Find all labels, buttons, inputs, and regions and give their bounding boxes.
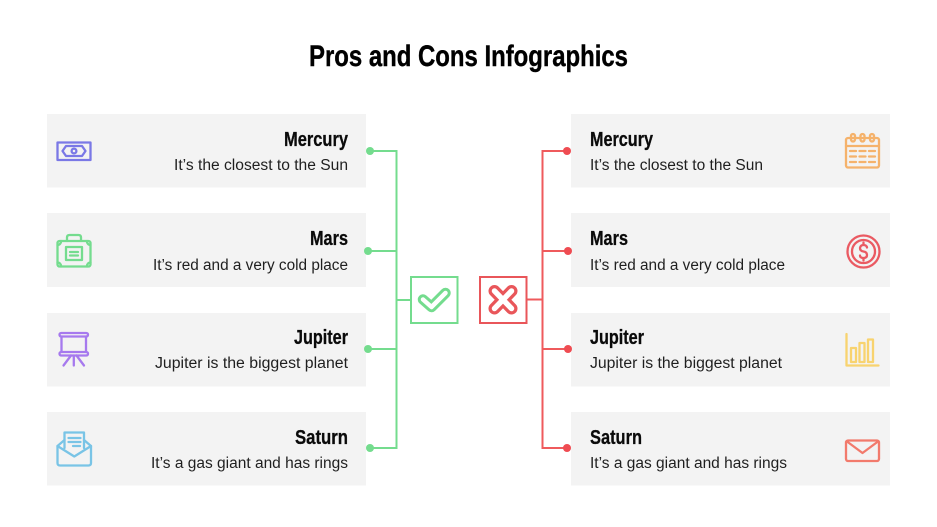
heading: Mars: Mars xyxy=(310,227,348,250)
icon: envelope xyxy=(846,440,879,461)
heading: Saturn: Saturn xyxy=(295,426,348,449)
heading: Mars: Mars xyxy=(590,227,628,250)
panel: cons Saturn xyxy=(571,412,890,486)
heading: Saturn: Saturn xyxy=(590,426,642,449)
icon: calendar xyxy=(846,134,879,168)
text: Jupiter description: Jupiter is the biggest planet xyxy=(155,355,349,372)
text: Jupiter description: Jupiter is the biggest planet xyxy=(590,355,783,372)
connector: pros xyxy=(364,147,411,452)
text: Mercury description: It’s the closest to the Sun xyxy=(590,157,763,174)
panel: pros Mercury xyxy=(47,114,366,188)
panel: pros Jupiter xyxy=(47,313,366,386)
text: Mercury description: It’s the closest to the Sun xyxy=(174,157,348,174)
text: Mars description: It’s red and a very cold place xyxy=(590,257,785,274)
heading: Jupiter: Jupiter xyxy=(294,326,348,349)
icon: open envelope xyxy=(58,432,91,466)
text: Saturn description: It’s a gas giant and has rings xyxy=(590,455,787,472)
panel: pros Mars xyxy=(47,213,366,287)
text: Mars description: It’s red and a very cold place xyxy=(153,257,348,274)
heading: Mercury: Mercury xyxy=(284,128,348,151)
panel: cons Jupiter xyxy=(571,313,890,386)
heading: Jupiter: Jupiter xyxy=(590,326,644,349)
panel: cons Mars xyxy=(571,213,890,287)
heading: Mercury: Mercury xyxy=(590,128,653,151)
title: Pros and Cons Infographics xyxy=(309,40,628,73)
icon: check box xyxy=(411,277,458,323)
icon: cross box xyxy=(480,277,526,323)
text: Saturn description: It’s a gas giant and has rings xyxy=(151,455,348,472)
icon: bar chart xyxy=(846,334,878,366)
icon: suitcase xyxy=(58,235,90,266)
icon: dollar coin xyxy=(848,236,880,268)
icon: presentation board xyxy=(60,333,88,366)
panel: cons Mercury xyxy=(571,114,890,188)
panel: pros Saturn xyxy=(47,412,366,486)
connector: cons xyxy=(526,147,572,452)
icon: banknote xyxy=(58,142,90,160)
